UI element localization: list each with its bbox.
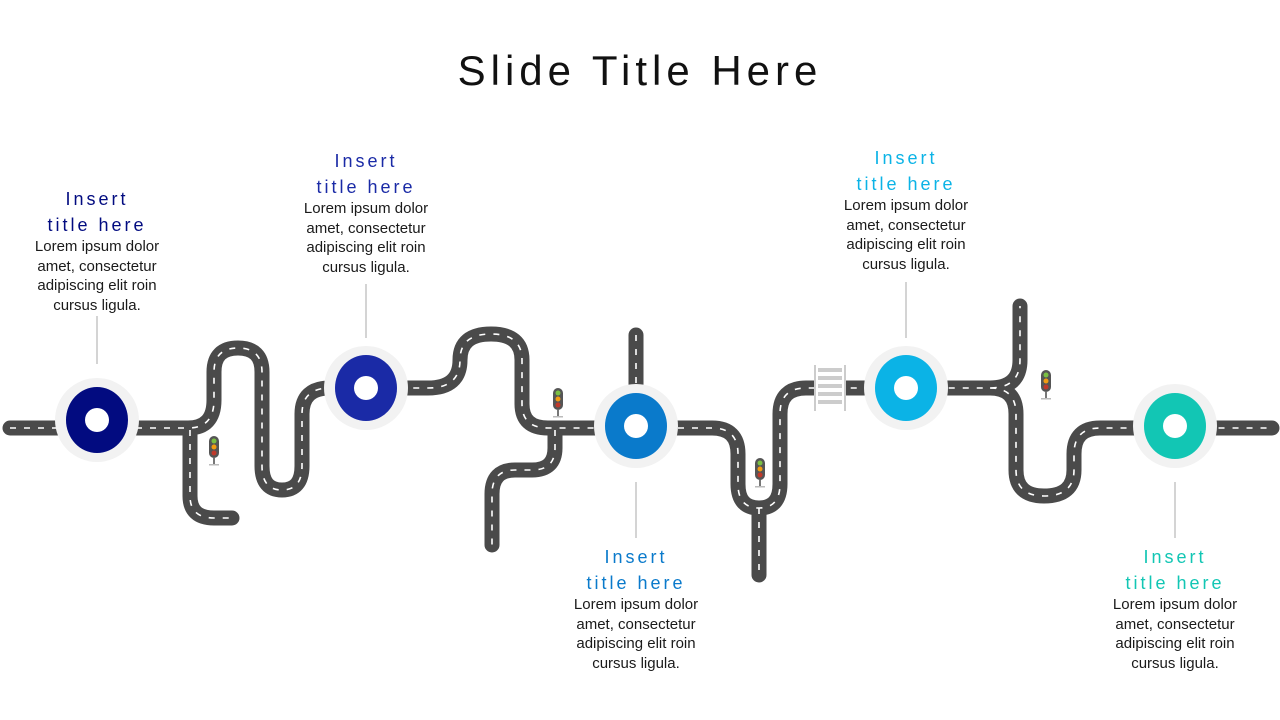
text block 2: Lorem ipsum dolor: [304, 200, 428, 217]
text block 3: Lorem ipsum dolor: [574, 596, 698, 613]
connector lines: [97, 282, 1175, 538]
traffic lights: [209, 370, 1051, 488]
text block 2: adipiscing elit roin: [306, 239, 426, 256]
text block 2: title here: [316, 177, 416, 197]
text block 3: title here: [586, 573, 686, 593]
text block 2: [304, 151, 428, 276]
road network: [10, 306, 1272, 575]
text block 2: Insert: [334, 151, 398, 171]
text block 3: adipiscing elit roin: [576, 635, 696, 652]
text block 1: cursus ligula.: [53, 297, 141, 314]
text block 4: Insert: [874, 148, 938, 168]
text block 5: Lorem ipsum dolor: [1113, 596, 1237, 613]
text block 5: adipiscing elit roin: [1115, 635, 1235, 652]
text block 3: cursus ligula.: [592, 655, 680, 672]
text block 5: amet, consectetur: [1115, 616, 1235, 633]
node 3: [594, 384, 678, 468]
text block 4: cursus ligula.: [862, 256, 950, 273]
title: Slide Title Here: [458, 47, 822, 94]
text block 4: title here: [856, 174, 956, 194]
text block 1: amet, consectetur: [37, 258, 157, 275]
text block 2: amet, consectetur: [306, 220, 426, 237]
text block 1: Lorem ipsum dolor: [35, 238, 159, 255]
crosswalk: [814, 365, 846, 411]
text block 1: [35, 189, 159, 314]
text block 4: Lorem ipsum dolor: [844, 197, 968, 214]
node 4: [864, 346, 948, 430]
text block 5: title here: [1125, 573, 1225, 593]
text block 1: adipiscing elit roin: [37, 277, 157, 294]
text block 4: adipiscing elit roin: [846, 236, 966, 253]
node 1: [55, 378, 139, 462]
text block 5: [1113, 547, 1237, 672]
node 2: [324, 346, 408, 430]
text block 3: amet, consectetur: [576, 616, 696, 633]
text block 3: Insert: [604, 547, 668, 567]
text block 5: Insert: [1143, 547, 1207, 567]
text block 2: cursus ligula.: [322, 259, 410, 276]
node 5: [1133, 384, 1217, 468]
text block 1: Insert: [65, 189, 129, 209]
text block 3: [574, 547, 698, 672]
text block 4: [844, 148, 968, 273]
text block 1: title here: [47, 215, 147, 235]
text block 4: amet, consectetur: [846, 217, 966, 234]
text block 5: cursus ligula.: [1131, 655, 1219, 672]
